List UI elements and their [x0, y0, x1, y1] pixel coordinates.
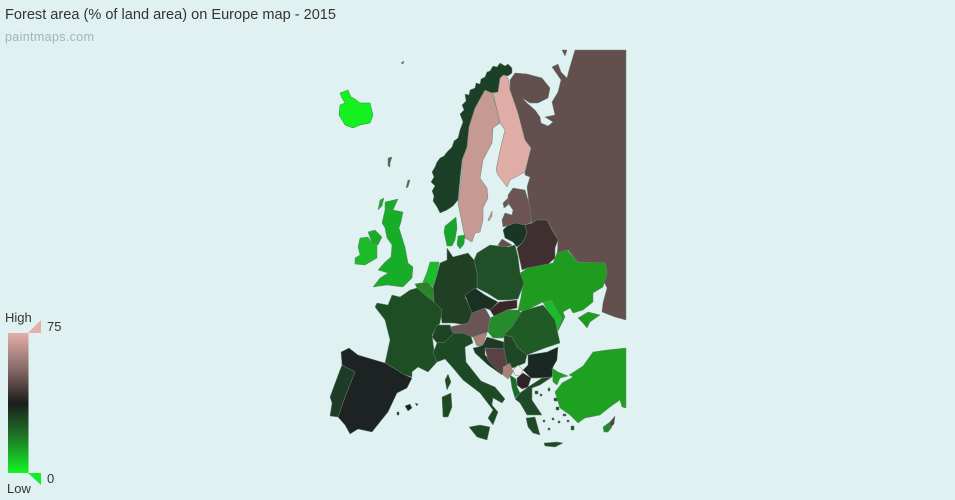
- Faroe Islands: [388, 157, 392, 167]
- title: Forest area (% of land area) on Europe map - 2015: [5, 7, 336, 23]
- Netherlands: [423, 262, 439, 287]
- Slovenia: [473, 333, 487, 346]
- Belarus: [517, 220, 558, 270]
- Estonia and Latvia: [502, 188, 532, 227]
- France: [375, 288, 442, 377]
- Shetland: [406, 180, 410, 188]
- legend max value: 75: [47, 319, 61, 334]
- Bulgaria: [523, 347, 558, 378]
- Estonian island: [503, 198, 508, 208]
- legend low marker: [28, 473, 41, 485]
- Sweden: [458, 90, 500, 242]
- Corsica: [445, 374, 451, 390]
- Bosnia: [485, 348, 507, 375]
- Iceland: [339, 90, 373, 128]
- Hebrides: [378, 198, 384, 210]
- map of Europe: [330, 50, 626, 447]
- legend high marker: [28, 320, 41, 333]
- Denmark: [444, 217, 457, 246]
- Cyprus: [603, 422, 612, 432]
- Poland: [474, 245, 524, 300]
- Belgium: [415, 282, 434, 302]
- no-data territory: [513, 365, 523, 376]
- Italy: [433, 333, 505, 425]
- watermark: paintmaps.com: [5, 30, 94, 44]
- Ireland: [355, 237, 377, 265]
- Croatia: [473, 337, 504, 375]
- Ukraine: [518, 250, 607, 331]
- Albania: [510, 375, 520, 398]
- Austria: [450, 308, 490, 337]
- Romania: [504, 305, 560, 355]
- Finland: [493, 75, 531, 187]
- Switzerland: [432, 325, 454, 343]
- Crete: [544, 442, 563, 447]
- Greek islands: [535, 388, 574, 430]
- Jan Mayen: [401, 61, 404, 64]
- Sardinia: [442, 393, 452, 417]
- Hungary: [488, 310, 522, 338]
- Russia: [498, 50, 626, 320]
- Macedonia: [517, 373, 531, 389]
- Germany: [433, 248, 477, 325]
- Montenegro: [503, 363, 513, 379]
- United Kingdom: [373, 199, 413, 287]
- Lithuania: [503, 223, 527, 247]
- Turkey in Europe: [552, 368, 568, 385]
- Moldova: [543, 300, 562, 330]
- legend low label: Low: [7, 481, 31, 496]
- legend min value: 0: [47, 471, 54, 486]
- legend high label: High: [5, 310, 32, 325]
- Norway: [431, 63, 512, 213]
- Portugal: [330, 365, 355, 417]
- Sicily: [469, 425, 490, 440]
- Gotland: [488, 211, 492, 221]
- Balearic Islands: [397, 403, 418, 415]
- Peloponnese: [526, 417, 540, 435]
- Northern Cyprus: [609, 416, 615, 427]
- Czech Republic: [465, 288, 498, 313]
- legend color bar: [8, 333, 28, 473]
- Serbia: [504, 335, 527, 368]
- Northern Ireland: [368, 230, 382, 245]
- Slovakia: [490, 300, 517, 318]
- Crimea: [578, 312, 600, 328]
- Greece: [515, 377, 552, 415]
- Spain: [338, 348, 412, 434]
- Danish islands: [457, 235, 465, 249]
- Turkey: [555, 348, 626, 423]
- legend: [5, 310, 61, 496]
